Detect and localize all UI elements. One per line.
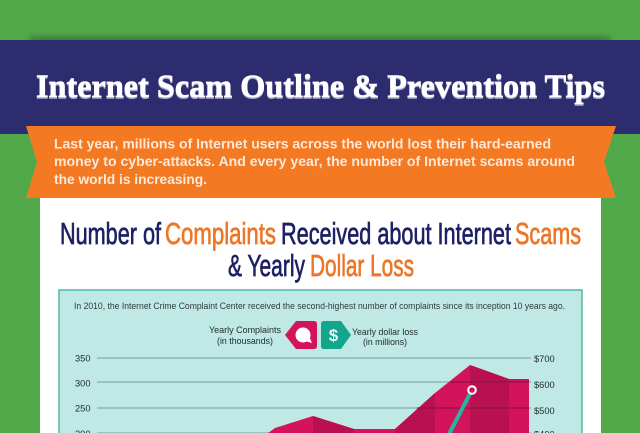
white content panel xyxy=(40,198,601,433)
chart heading: Scams xyxy=(515,216,581,251)
intro text line 1: Last year, millions of Internet users across the world lost their hard-earned xyxy=(54,136,551,152)
legend: yearly complaints: Yearly Complaints xyxy=(209,325,281,336)
band shadow xyxy=(30,37,610,43)
right axis labels: $600 xyxy=(534,380,555,390)
intro text line 3: the world is increasing. xyxy=(54,172,207,187)
chart heading: Dollar Loss xyxy=(310,248,414,283)
area chart: yearly complaints xyxy=(268,365,529,433)
legend: yearly dollar loss: Yearly dollar loss xyxy=(352,327,418,338)
chart panel xyxy=(59,290,582,433)
chart heading: Received about Internet xyxy=(281,216,511,251)
right axis labels: $500 xyxy=(534,406,555,416)
legend: yearly dollar loss: (in millions) xyxy=(363,337,407,348)
icon: dollar tag: $ xyxy=(329,326,339,345)
title shadow: Internet Scam Outline & Prevention Tips xyxy=(36,70,605,106)
orange ribbon intro xyxy=(26,126,616,198)
left axis labels: 300 xyxy=(75,378,91,388)
right axis labels: $700 xyxy=(534,354,555,364)
right axis labels xyxy=(534,354,555,433)
icon: complaints speech bubble xyxy=(285,321,317,349)
legend: yearly complaints xyxy=(209,325,281,347)
chart heading xyxy=(60,216,581,283)
grid lines xyxy=(97,358,531,433)
chart heading: Number of xyxy=(60,216,161,251)
left axis labels xyxy=(75,354,91,433)
chart heading: Complaints xyxy=(165,216,276,251)
left axis labels: 250 xyxy=(75,404,91,414)
line chart: yearly dollar loss xyxy=(448,386,476,433)
legend: yearly complaints: (in thousands) xyxy=(217,336,273,347)
legend: yearly dollar loss xyxy=(352,327,418,348)
title band xyxy=(0,40,640,134)
left axis labels: 350 xyxy=(75,354,91,364)
chart heading: & Yearly xyxy=(228,248,305,283)
chart note: In 2010, the Internet Crime Complaint Center received the second-highest number of complaints since its inception 10 years ago. xyxy=(74,301,565,312)
intro text line 2: money to cyber-attacks. And every year, the number of Internet scams around xyxy=(54,154,575,169)
title: Internet Scam Outline & Prevention Tips xyxy=(36,69,605,105)
icon: dollar tag xyxy=(321,321,351,349)
